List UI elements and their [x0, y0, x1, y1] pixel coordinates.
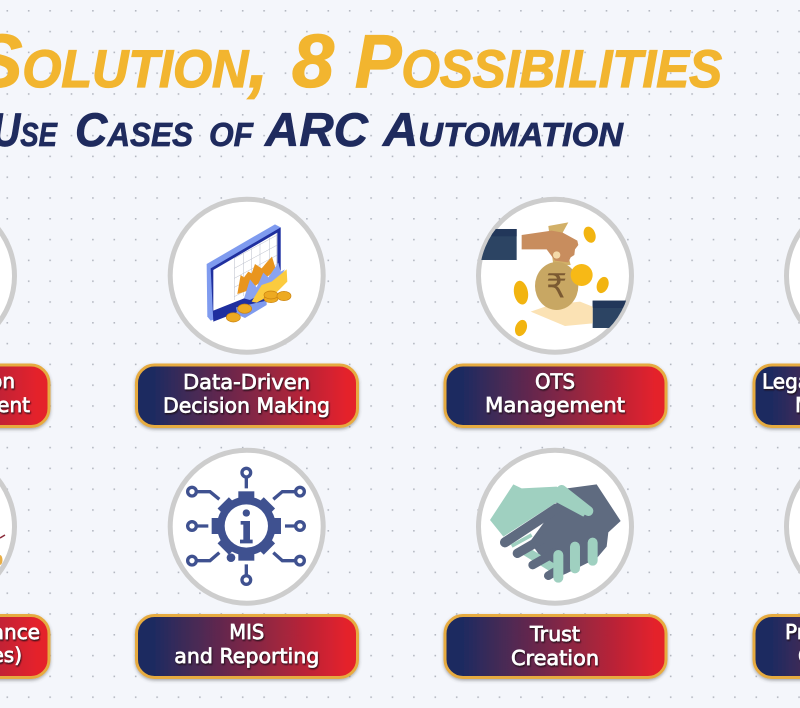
panel: Trust Creation	[445, 450, 666, 678]
icon: hand with rupee bag and coins: ₹	[546, 266, 567, 305]
label: bottom right	[754, 616, 800, 678]
icon circle: bottom right	[786, 450, 800, 603]
panel: partial card top right	[754, 200, 800, 426]
panel: MIS and Reporting	[136, 450, 358, 678]
label: top right	[754, 365, 800, 426]
label: data: Data-Driven	[183, 370, 310, 394]
icon: handshake	[490, 484, 621, 578]
panel: partial card top left	[0, 200, 49, 426]
icon: hand with rupee bag and coins	[473, 222, 633, 338]
label: trust: Creation	[511, 646, 599, 670]
icon circle: data	[170, 199, 323, 352]
panel: Data-Driven Decision Making	[136, 199, 358, 426]
icon circle: bottom left	[0, 450, 14, 603]
icon circle: MIS	[170, 450, 323, 603]
label: MIS	[136, 616, 358, 678]
label: data: Decision Making	[163, 394, 330, 418]
icon circle: top left	[0, 200, 14, 352]
title: Possibilities	[355, 19, 722, 103]
label: MIS: MIS	[229, 620, 264, 644]
panel: partial card bottom left	[0, 450, 49, 678]
label: OTS	[445, 365, 666, 426]
label: OTS: Management	[485, 393, 625, 417]
label: bottom left	[0, 616, 49, 678]
label: MIS: and Reporting	[174, 644, 319, 668]
panel: partial card bottom right	[754, 450, 800, 678]
icon: partial bottom left marks	[0, 535, 5, 565]
icon circle: OTS	[478, 199, 632, 352]
subtitle: Cases	[75, 103, 193, 156]
panel: OTS Management	[445, 199, 666, 426]
label: top left	[0, 365, 49, 426]
icon circle: top right	[786, 200, 800, 352]
icon: monitor with charts and coins	[207, 224, 291, 322]
subtitle	[0, 103, 624, 156]
title: 8	[292, 19, 334, 103]
icon: gear with info symbol and connectors	[188, 468, 304, 584]
label: trust	[445, 616, 666, 678]
label: data	[136, 365, 358, 426]
icon circle: trust	[478, 450, 632, 603]
subtitle: ARC	[264, 103, 369, 156]
label: trust: Trust	[529, 622, 580, 646]
subtitle: of	[209, 103, 254, 156]
subtitle: Automation	[382, 103, 624, 156]
label: OTS: OTS	[535, 370, 575, 394]
title	[0, 19, 722, 103]
